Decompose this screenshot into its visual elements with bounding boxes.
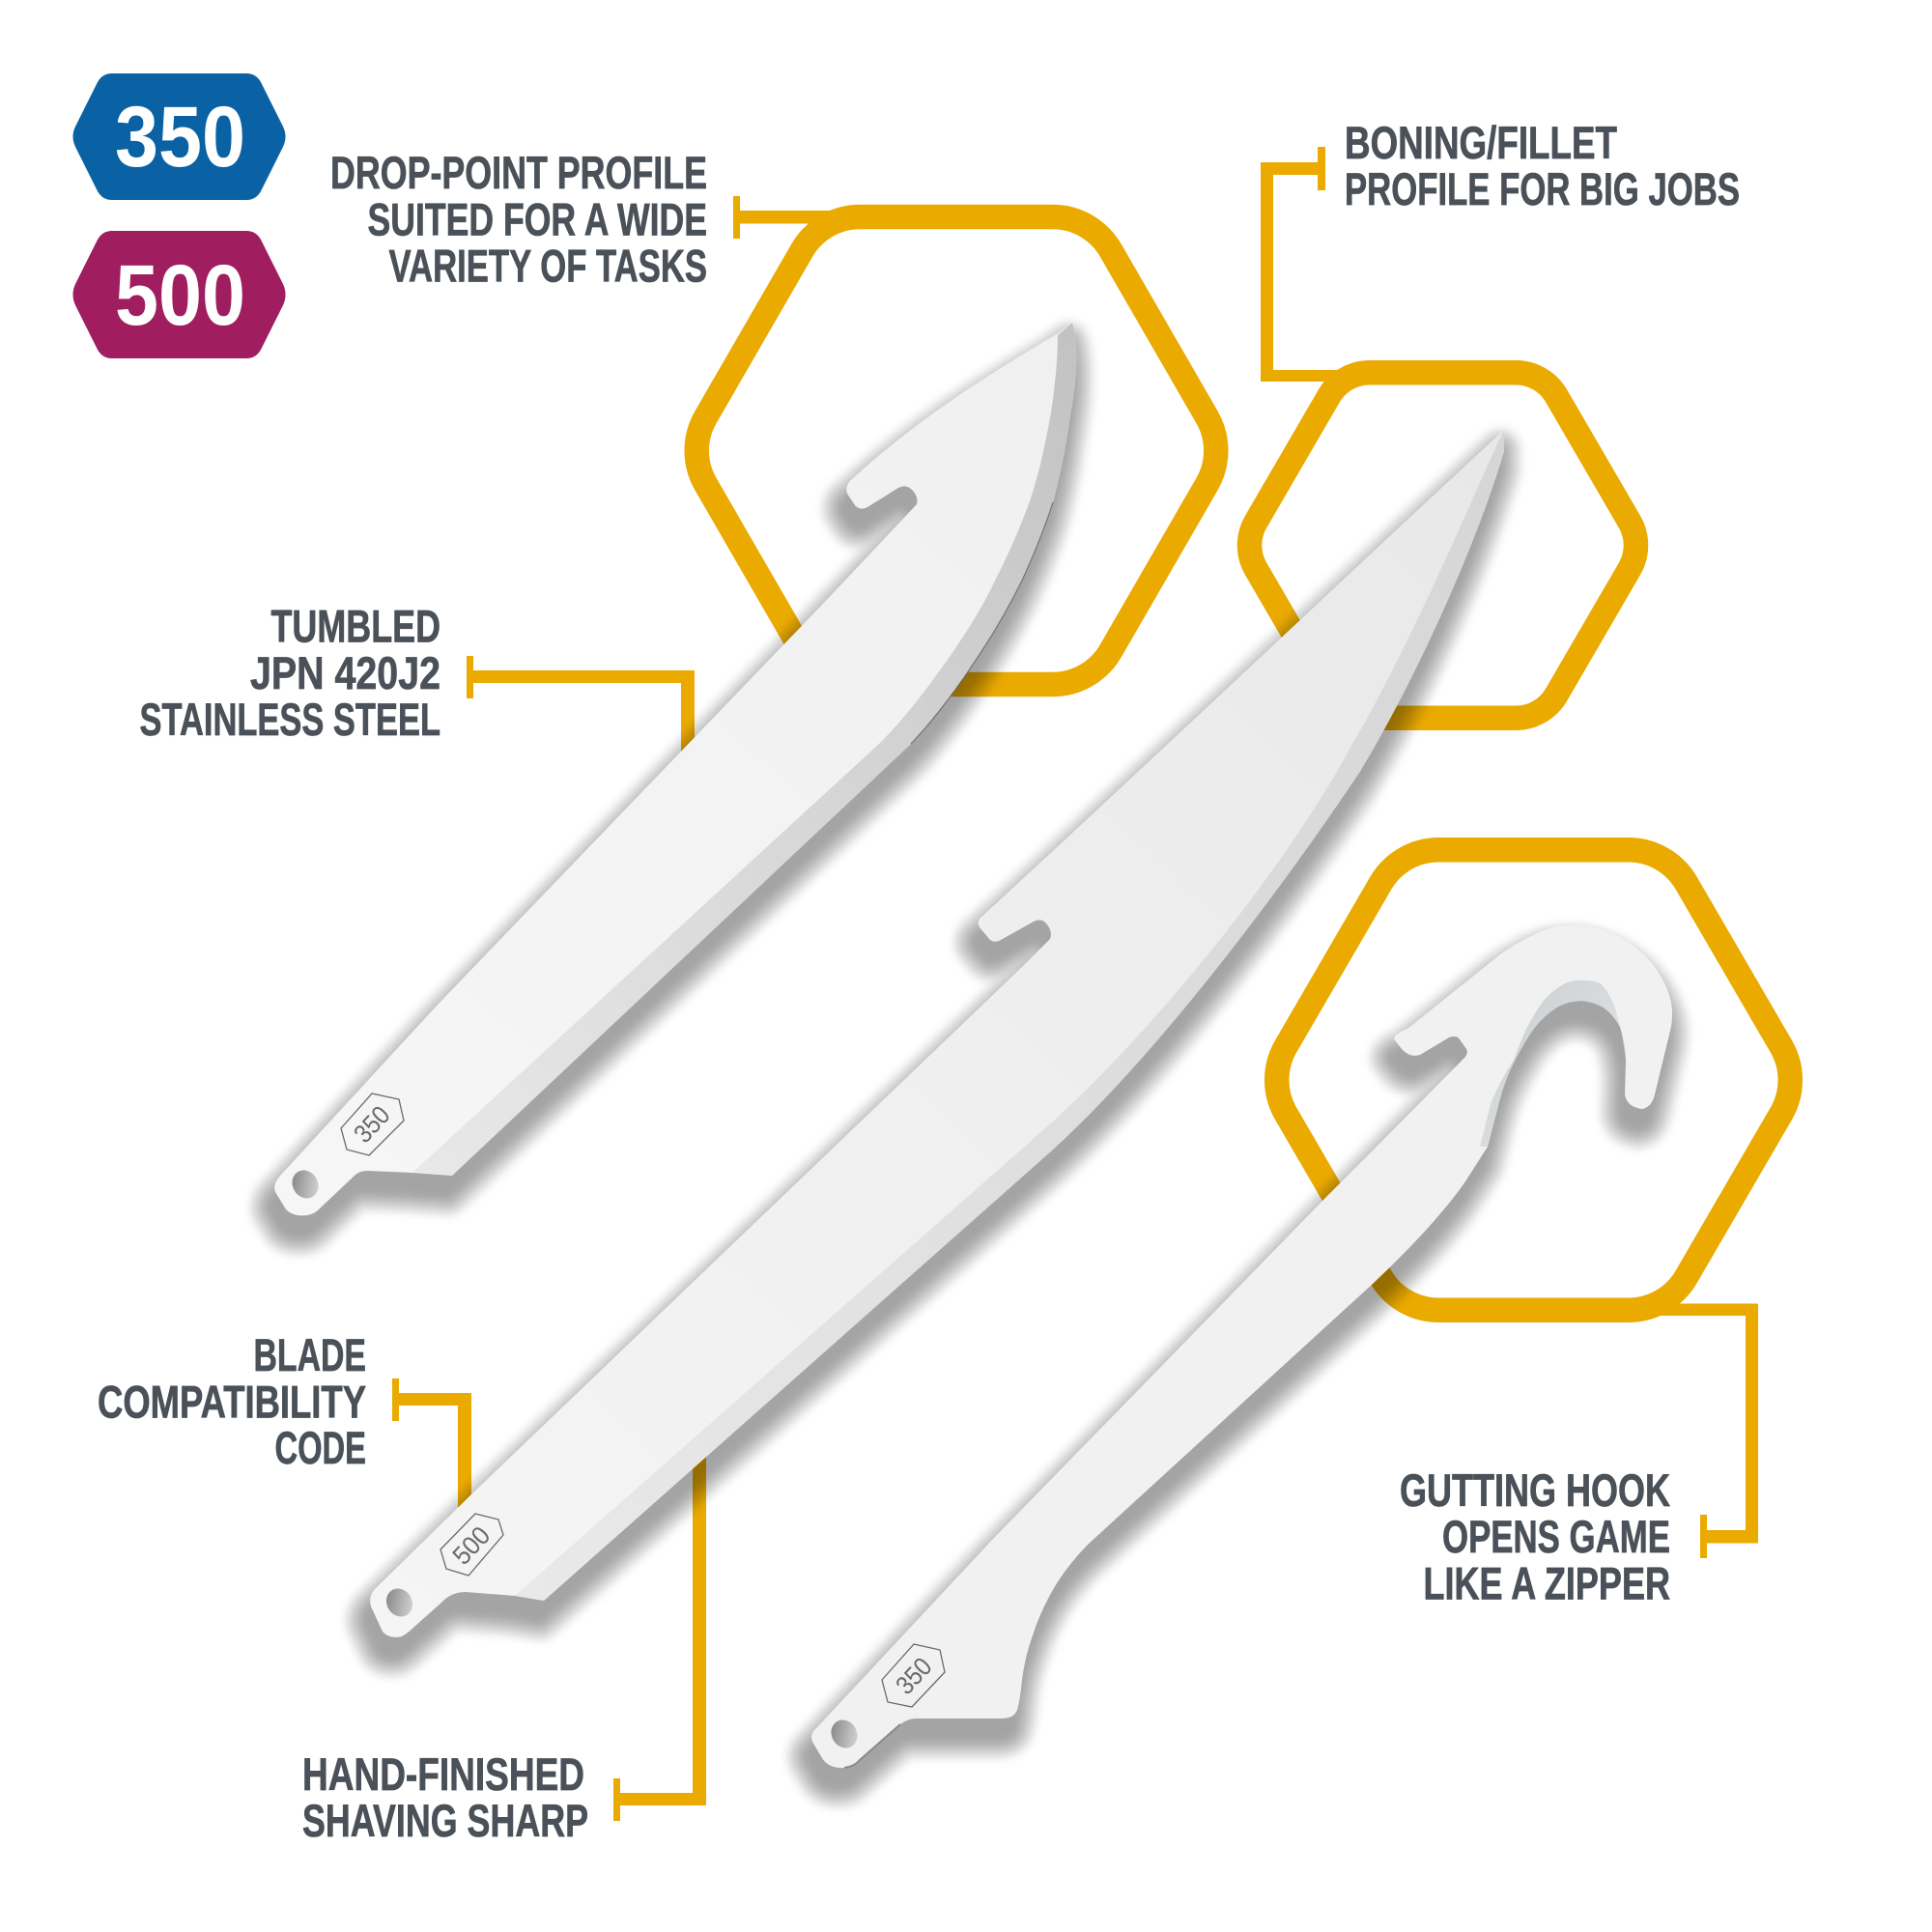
blade shadow: [366, 449, 1500, 1657]
text: blade code: CODE: [274, 1422, 366, 1473]
text: blade code: [98, 1329, 366, 1473]
text: boning profile: PROFILE FOR BIG JOBS: [1345, 163, 1740, 214]
text: drop-point profile: SUITED FOR A WIDE: [367, 193, 707, 245]
blade body: [370, 430, 1504, 1637]
blade stamp: 500: [440, 1514, 503, 1576]
blade stamp: 350: 350: [890, 1652, 938, 1700]
leader: boning profile: [1261, 147, 1348, 382]
text: gutting hook: OPENS GAME: [1442, 1511, 1670, 1562]
blade stamp: 350: 350: [348, 1100, 396, 1149]
blade: gutting hook 350: [808, 925, 1672, 1787]
leader: hand-finished: [613, 1449, 706, 1821]
blade body: [811, 925, 1672, 1768]
text: tumbled steel: TUMBLED: [270, 601, 440, 651]
text: drop-point profile: [330, 147, 707, 292]
text: boning profile: [1345, 117, 1740, 214]
cutting bevel: [413, 323, 1076, 1176]
text: gutting hook: [1400, 1464, 1670, 1609]
text: drop-point profile: VARIETY OF TASKS: [388, 240, 707, 292]
leader: tumbled steel: [467, 656, 695, 773]
blade stamp: 350: [341, 1094, 404, 1155]
badge: 500: 500: [115, 246, 245, 343]
sharpened edge: [911, 502, 1053, 744]
badge: 350: 350: [115, 88, 245, 185]
blade stamp: 500: 500: [447, 1520, 496, 1571]
blade body: [274, 323, 1076, 1215]
tang hole: [382, 1584, 417, 1621]
text: gutting hook: LIKE A ZIPPER: [1424, 1557, 1670, 1609]
blade shadow: [270, 342, 1072, 1235]
blade: boning fillet 500: [366, 430, 1504, 1657]
blade shadow: [808, 945, 1668, 1787]
text: hand-finished: [302, 1748, 588, 1846]
blade stamp: 350: [882, 1644, 945, 1707]
text: tumbled steel: STAINLESS STEEL: [139, 694, 440, 745]
text: boning profile: BONING/FILLET: [1345, 117, 1617, 168]
text: blade code: BLADE: [253, 1329, 366, 1380]
badge: 500: [73, 231, 286, 358]
leader: gutting hook: [1654, 1304, 1758, 1558]
text: gutting hook: GUTTING HOOK: [1400, 1464, 1670, 1516]
blade: drop-point 350: [270, 323, 1076, 1235]
tang hole: [287, 1166, 324, 1203]
hexagon frame: boning blade: [1250, 373, 1635, 718]
tang hole: [826, 1716, 863, 1752]
text: drop-point profile: DROP-POINT PROFILE: [330, 147, 707, 198]
badge: 350: [73, 73, 286, 200]
text: hand-finished: SHAVING SHARP: [302, 1795, 588, 1846]
leader: drop-point profile: [733, 196, 831, 239]
tang edge: [844, 1724, 900, 1768]
cutting bevel: [515, 430, 1504, 1601]
text: tumbled steel: [139, 601, 440, 745]
text: blade code: COMPATIBILITY: [98, 1376, 366, 1428]
hexagon frame: gutting hook: [1277, 850, 1790, 1310]
text: hand-finished: HAND-FINISHED: [302, 1748, 584, 1800]
leader: blade code: [392, 1378, 471, 1526]
hexagon frame: drop-point blade: [696, 216, 1216, 684]
text: tumbled steel: JPN 420J2: [250, 647, 440, 698]
hook inner bevel: [1480, 980, 1626, 1147]
